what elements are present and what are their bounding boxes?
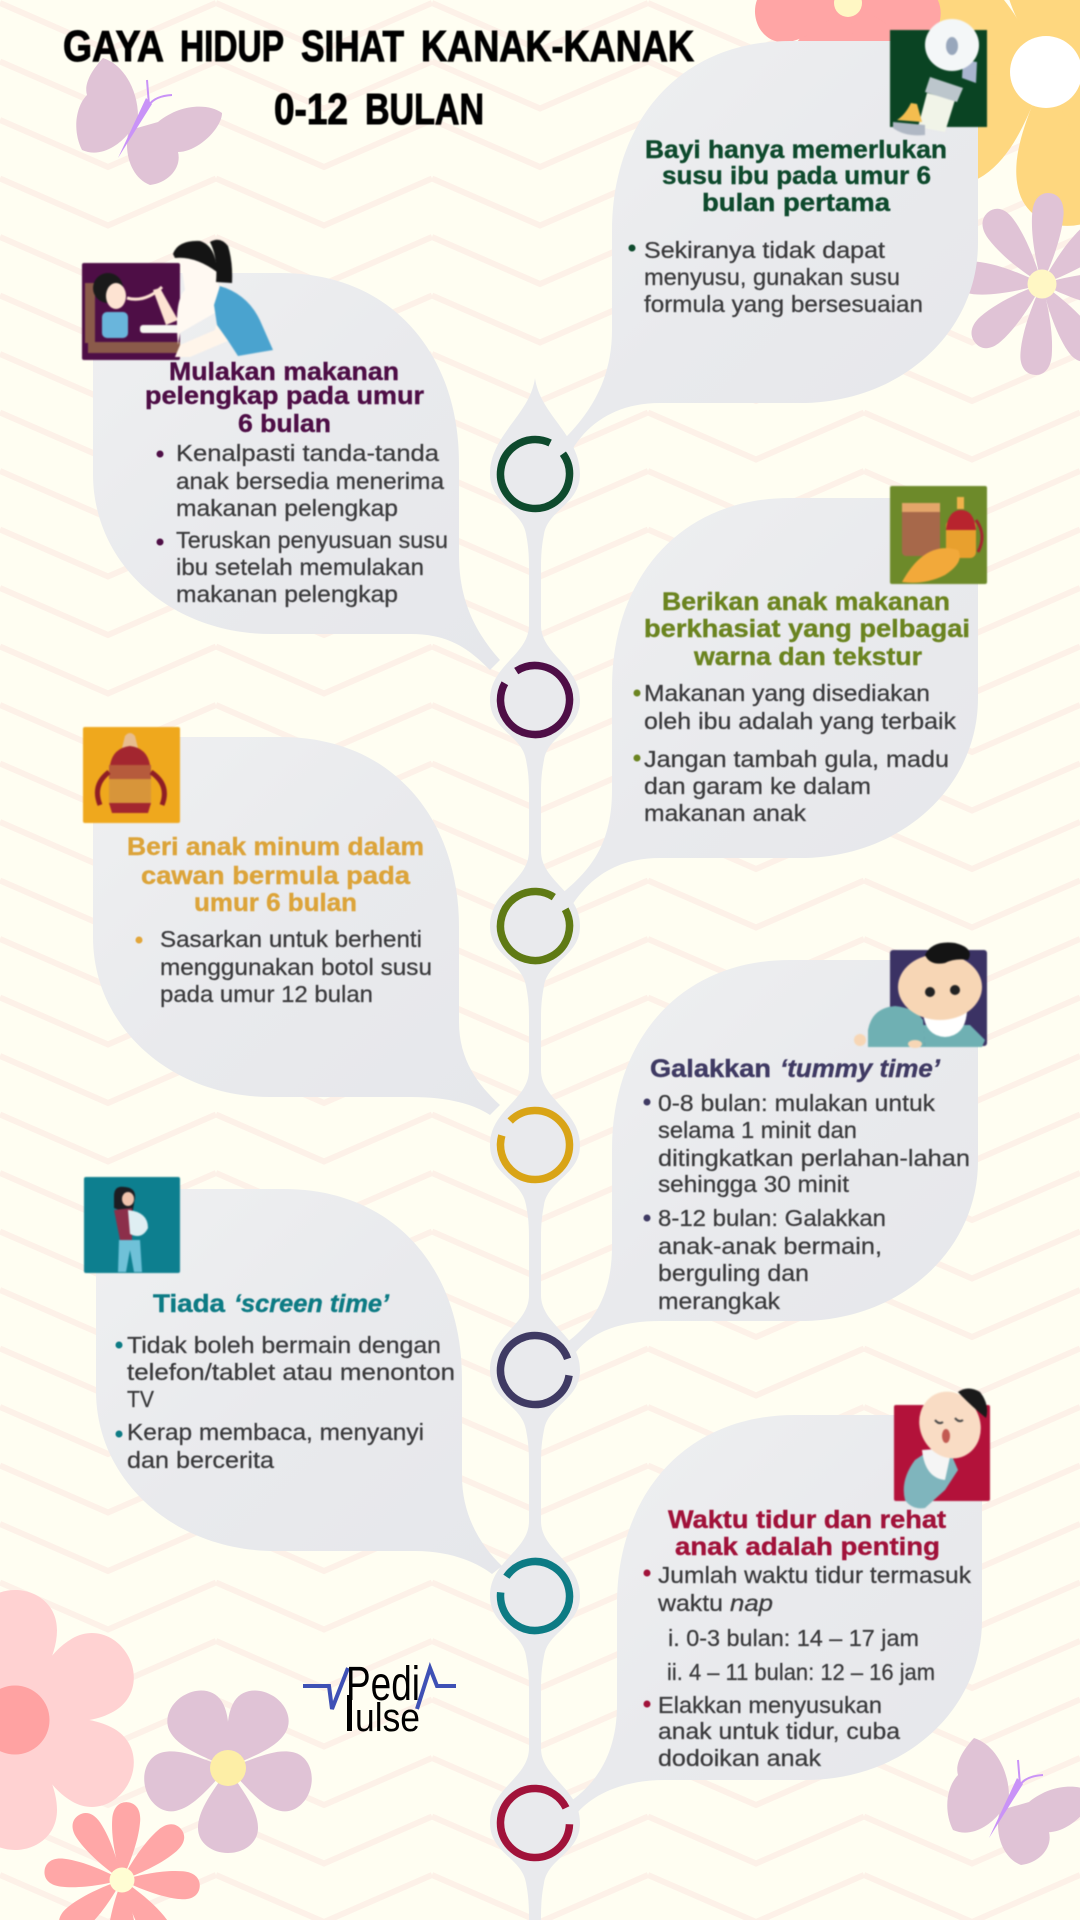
text block: merangkak xyxy=(658,1288,781,1314)
heading: cawan bermula pada xyxy=(141,862,411,890)
text block: dodoikan anak xyxy=(658,1745,822,1771)
flower: bottom left big pink xyxy=(0,1590,149,1850)
title xyxy=(63,22,694,134)
text block xyxy=(116,1332,455,1473)
text block: nap xyxy=(730,1590,773,1616)
heading: warna dan tekstur xyxy=(693,643,922,671)
text block: Sekiranya tidak dapat xyxy=(644,237,886,263)
text block: dan garam ke dalam xyxy=(644,773,871,799)
timeline rings xyxy=(486,426,584,1859)
text block: oleh ibu adalah yang terbaik xyxy=(644,708,957,734)
heading: pelengkap pada umur xyxy=(145,382,424,410)
logo: PediPulse: Pedi xyxy=(346,1658,420,1711)
text block: Jangan tambah gula, madu xyxy=(644,746,949,772)
text block xyxy=(628,237,923,317)
panel: no screen time xyxy=(84,1177,502,1574)
heading: Waktu tidur dan rehat xyxy=(668,1506,947,1534)
text block: ditingkatkan perlahan-lahan xyxy=(658,1145,970,1171)
flower: bottom salmon xyxy=(43,1801,201,1920)
text block: Teruskan penyusuan susu xyxy=(176,527,448,553)
text block: sehingga 30 minit xyxy=(658,1171,850,1197)
text block: Elakkan menyusukan xyxy=(658,1692,882,1718)
text block: telefon/tablet atau menonton xyxy=(127,1359,455,1385)
panel: nutritious food xyxy=(556,486,987,905)
text block: formula yang bersesuaian xyxy=(644,291,923,317)
logo: PediPulse xyxy=(303,1658,456,1740)
heading: Tiada xyxy=(153,1290,226,1318)
timeline stem xyxy=(490,378,580,1920)
text block xyxy=(644,1090,970,1314)
flower: right purple xyxy=(954,192,1080,376)
text block: i. 0-3 bulan: 14 – 17 jam xyxy=(668,1625,919,1651)
text block: selama 1 minit dan xyxy=(658,1117,857,1143)
heading xyxy=(668,1506,947,1561)
text block: makanan pelengkap xyxy=(176,581,398,607)
text block: Tidak boleh bermain dengan xyxy=(127,1332,441,1358)
text block: ibu setelah memulakan xyxy=(176,554,424,580)
title: SIHAT xyxy=(301,22,404,71)
heading: berkhasiat yang pelbagai xyxy=(644,615,970,643)
title: 0-12 xyxy=(274,85,348,134)
heading xyxy=(644,588,970,671)
title: KANAK-KANAK xyxy=(421,22,694,71)
title: BULAN xyxy=(365,85,484,134)
icon: sleeping baby xyxy=(894,1382,992,1508)
panel: sleep and rest xyxy=(568,1382,992,1812)
text block xyxy=(644,1562,972,1771)
text block: Makanan yang disediakan xyxy=(644,680,930,706)
icon: sippy cup xyxy=(83,727,180,823)
text block: ii. 4 – 11 bulan: 12 – 16 jam xyxy=(667,1659,935,1685)
icon: breast pump xyxy=(890,19,987,135)
text block xyxy=(136,926,432,1007)
title: HIDUP xyxy=(180,22,284,71)
text block: Jumlah waktu tidur termasuk xyxy=(658,1562,972,1588)
text block: Kerap membaca, menyanyi xyxy=(127,1419,424,1445)
heading xyxy=(650,1055,941,1083)
heading xyxy=(127,833,424,917)
text block: 8-12 bulan: Galakkan xyxy=(658,1205,886,1231)
text block: menggunakan botol susu xyxy=(160,954,432,980)
heading: 6 bulan xyxy=(238,410,331,438)
panel: tummy time xyxy=(566,942,987,1352)
title: GAYA xyxy=(63,22,164,71)
flower: bottom purple xyxy=(138,1680,318,1853)
text block: berguling dan xyxy=(658,1260,809,1286)
text block: waktu xyxy=(657,1590,723,1616)
heading: Beri anak minum dalam xyxy=(127,833,424,861)
text block: anak-anak bermain, xyxy=(658,1233,882,1259)
heading: Bayi hanya memerlukan xyxy=(645,136,947,164)
butterfly: top left xyxy=(76,58,222,185)
heading: susu ibu pada umur 6 xyxy=(662,162,931,190)
text block: Sasarkan untuk berhenti xyxy=(160,926,422,952)
text block: anak untuk tidur, cuba xyxy=(658,1718,900,1744)
icon: woman holding child xyxy=(84,1177,180,1273)
icon: food jars and carrot xyxy=(890,486,987,584)
butterfly: bottom right xyxy=(947,1738,1080,1865)
heading: bulan pertama xyxy=(702,189,891,217)
text block: dan bercerita xyxy=(127,1447,274,1473)
heading: Mulakan makanan xyxy=(169,358,399,386)
heading: ‘tummy time’ xyxy=(780,1055,941,1083)
flower: top right yellow xyxy=(879,0,1080,235)
heading: Berikan anak makanan xyxy=(662,588,950,616)
heading: umur 6 bulan xyxy=(194,889,357,917)
flower: top pink xyxy=(751,0,945,101)
icon: mother feeding child xyxy=(82,240,273,360)
heading xyxy=(145,358,424,438)
text block: makanan pelengkap xyxy=(176,495,398,521)
heading xyxy=(153,1290,390,1318)
text block: makanan anak xyxy=(644,800,807,826)
text block xyxy=(634,680,957,826)
logo: PediPulse: ulse xyxy=(355,1696,420,1740)
text block xyxy=(156,440,448,607)
heading: anak adalah penting xyxy=(675,1533,940,1561)
text block: TV xyxy=(127,1386,155,1412)
icon: crawling baby xyxy=(854,942,987,1048)
heading: Galakkan xyxy=(650,1055,771,1083)
heading: ‘screen time’ xyxy=(234,1290,390,1318)
panel: drinking from a cup xyxy=(83,727,500,1115)
text block: anak bersedia menerima xyxy=(176,468,444,494)
panel: complementary food xyxy=(82,240,500,670)
text block: 0-8 bulan: mulakan untuk xyxy=(658,1090,936,1116)
heading xyxy=(645,136,947,217)
panel: breast milk xyxy=(558,19,987,450)
text block: pada umur 12 bulan xyxy=(160,981,373,1007)
text block: Kenalpasti tanda-tanda xyxy=(176,440,439,466)
text block: menyusu, gunakan susu xyxy=(644,264,900,290)
